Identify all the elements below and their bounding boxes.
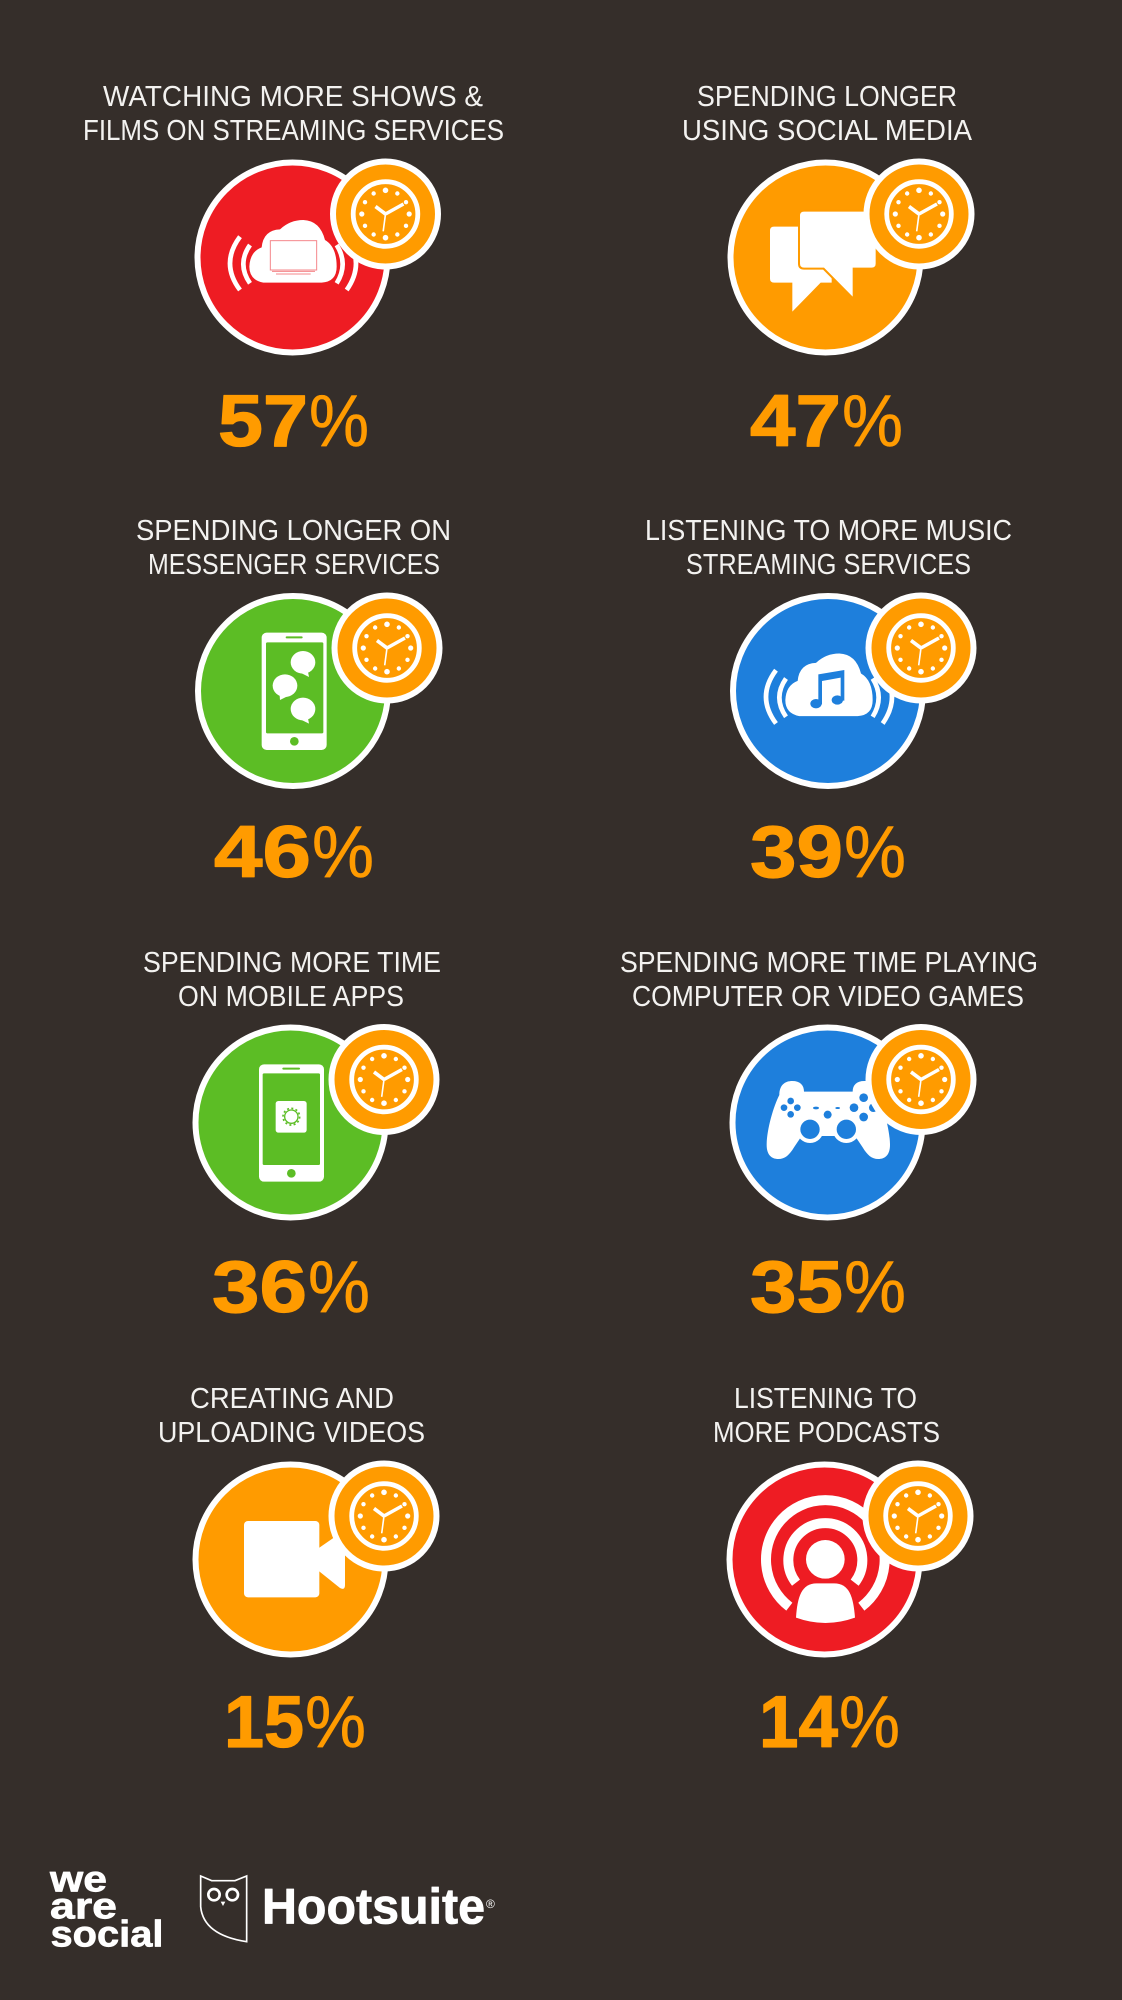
logo: we are social xyxy=(49,1859,164,1955)
panel: podcasts xyxy=(713,1383,970,1763)
icon: video camera xyxy=(244,1521,345,1597)
value: 46%: 46 xyxy=(214,812,311,893)
panel: video games xyxy=(620,947,1038,1328)
heading: music streaming: LISTENING TO MORE MUSIC xyxy=(645,515,1012,547)
icon: clock xyxy=(332,1027,436,1132)
icon: clock xyxy=(334,596,440,700)
icon: clock xyxy=(866,162,972,266)
value: 36%: % xyxy=(308,1247,370,1328)
heading: uploading videos: CREATING AND xyxy=(190,1383,394,1415)
value: 15%: % xyxy=(305,1682,366,1763)
panel: uploading videos xyxy=(158,1383,436,1763)
icon: game controller xyxy=(767,1081,890,1159)
icon: podcast broadcaster xyxy=(766,1500,885,1623)
heading: uploading videos: UPLOADING VIDEOS xyxy=(158,1417,425,1449)
value: 39%: % xyxy=(844,812,906,893)
value: 57%: % xyxy=(309,381,369,462)
heading: social media: SPENDING LONGER xyxy=(697,81,957,113)
value: 39%: 39 xyxy=(750,812,843,893)
value: 57%: 57 xyxy=(218,381,308,462)
value: 47%: % xyxy=(842,381,903,462)
heading: mobile apps: ON MOBILE APPS xyxy=(178,981,404,1013)
circle: orange background xyxy=(730,162,920,352)
value: 46%: % xyxy=(312,812,374,893)
circle: orange background xyxy=(196,1464,386,1654)
logo: we are social: we xyxy=(49,1859,107,1900)
heading: social media: USING SOCIAL MEDIA xyxy=(682,115,972,147)
logo: Hootsuite xyxy=(201,1876,495,1942)
panel: social media xyxy=(682,81,972,462)
value: 36%: 36 xyxy=(212,1247,307,1328)
value: 47%: 47 xyxy=(750,381,841,462)
heading: video games: SPENDING MORE TIME PLAYING xyxy=(620,947,1038,979)
circle: green background xyxy=(198,596,388,786)
value: 35%: 35 xyxy=(750,1247,843,1328)
icon: cloud with music note xyxy=(766,653,892,723)
circle: red background xyxy=(730,1464,920,1654)
icon: clock xyxy=(868,596,974,700)
heading: podcasts: MORE PODCASTS xyxy=(713,1417,940,1449)
icon: cloud with TV xyxy=(230,220,356,290)
registered mark: ® xyxy=(486,1897,495,1911)
panel: music streaming xyxy=(645,515,1012,893)
icon: clock xyxy=(333,162,438,266)
wordmark: Hootsuite: Hootsuite xyxy=(262,1878,485,1934)
logo: we are social: are xyxy=(50,1885,117,1926)
icon: clock xyxy=(866,1464,970,1568)
circle: blue background xyxy=(732,1028,922,1218)
circle: red background xyxy=(198,162,388,352)
heading: video games: COMPUTER OR VIDEO GAMES xyxy=(632,981,1024,1013)
icon: clock xyxy=(868,1027,974,1132)
value: 14%: 14 xyxy=(759,1682,838,1763)
heading: music streaming: STREAMING SERVICES xyxy=(686,549,971,581)
heading: podcasts: LISTENING TO xyxy=(734,1383,917,1415)
heading: mobile apps: SPENDING MORE TIME xyxy=(143,947,441,979)
value: 35%: % xyxy=(844,1247,906,1328)
circle: blue background xyxy=(733,596,923,786)
value: 15%: 15 xyxy=(224,1682,304,1763)
icon: chat bubbles xyxy=(770,212,876,312)
heading: streaming shows: FILMS ON STREAMING SERVICES xyxy=(83,115,504,147)
logo: we are social: social xyxy=(50,1914,164,1955)
icon: owl shield xyxy=(201,1876,247,1942)
panel: messenger services xyxy=(136,515,451,893)
heading: messenger services: SPENDING LONGER ON xyxy=(136,515,451,547)
heading: streaming shows: WATCHING MORE SHOWS & xyxy=(103,81,483,113)
icon: phone with app xyxy=(259,1064,324,1182)
value: 14%: % xyxy=(839,1682,900,1763)
icon: phone with messages xyxy=(262,633,327,750)
icon: clock xyxy=(332,1464,436,1568)
circle: green background xyxy=(196,1028,386,1218)
heading: messenger services: MESSENGER SERVICES xyxy=(148,549,440,581)
panel: streaming shows and films xyxy=(83,81,504,462)
panel: mobile apps xyxy=(143,947,441,1328)
